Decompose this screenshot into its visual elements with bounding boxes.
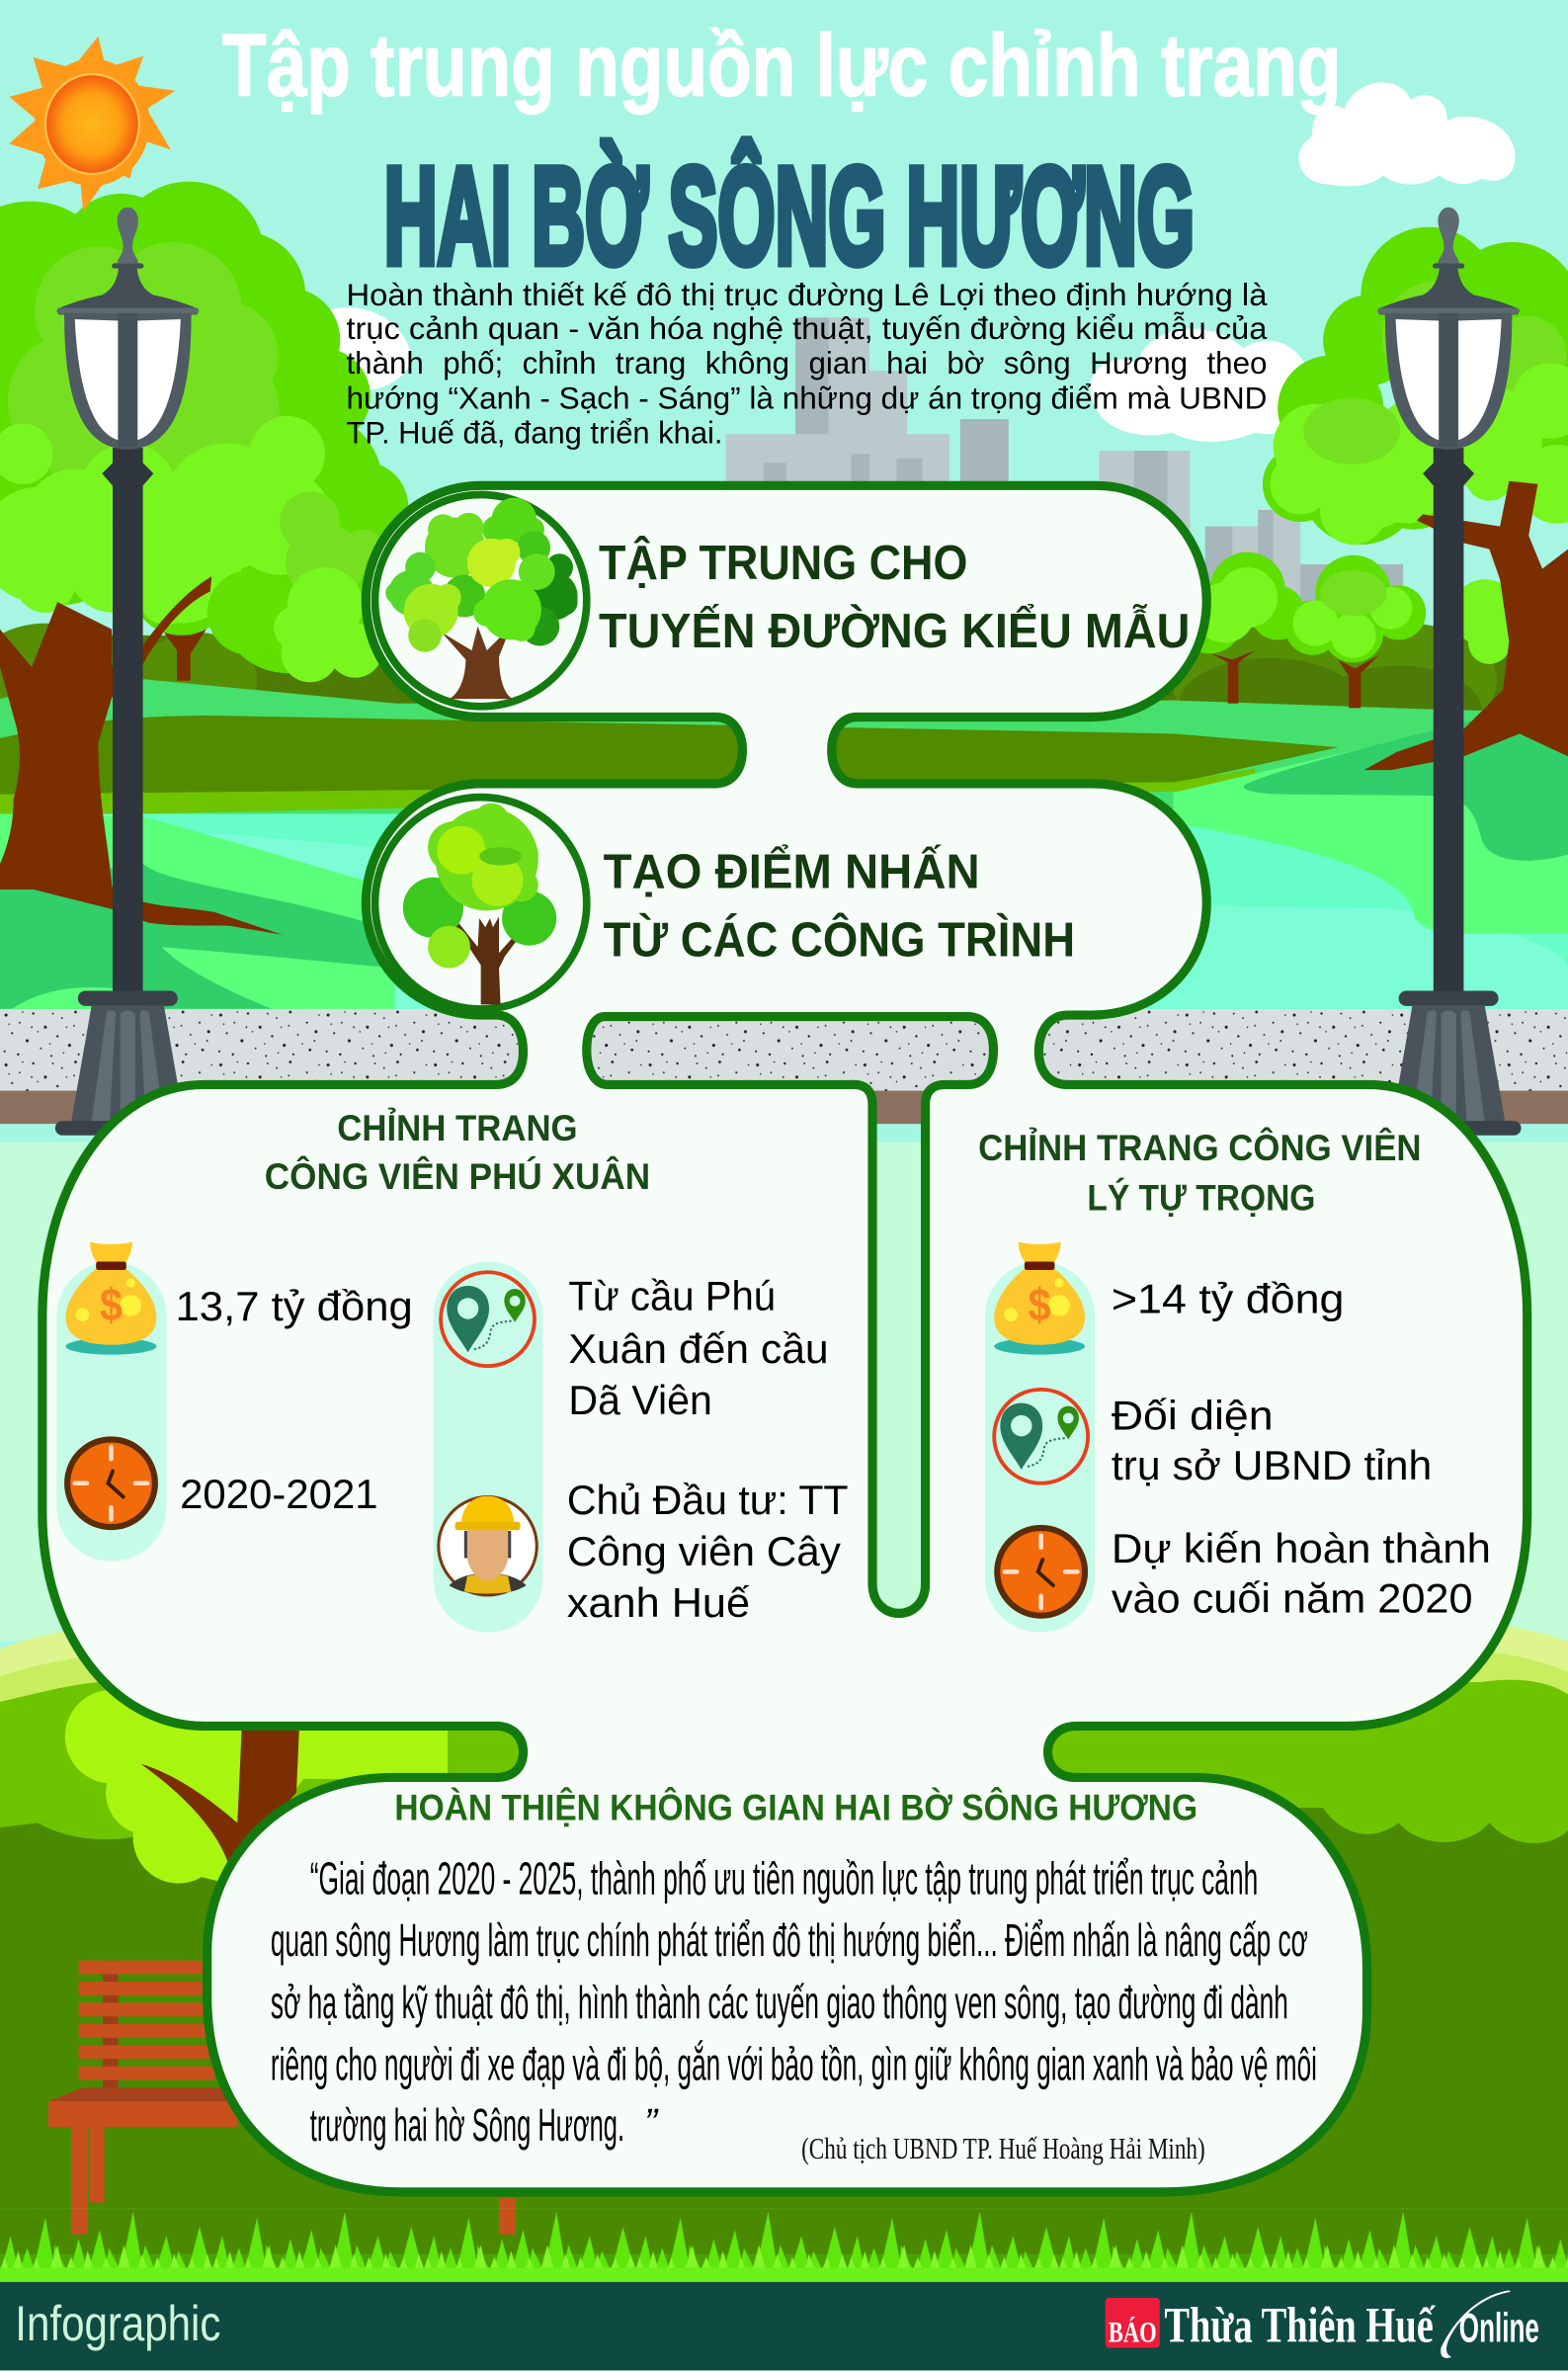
panel 4: công viên Lý Tự Trọng <box>978 1127 1491 1633</box>
quote text <box>271 1852 1317 2151</box>
panel: connected white frame <box>42 485 1527 2192</box>
location text: Từ cầu Phú <box>568 1273 776 1319</box>
completion text: Dự kiến hoàn thành <box>1112 1525 1491 1571</box>
heading: tạo điểm nhấn <box>604 845 1075 967</box>
newspaper logo: BÁO <box>1109 2316 1157 2348</box>
icon: route pin <box>994 1390 1088 1483</box>
intro paragraph: thành phố; chỉnh trang không gian hai bờ sông Hương theo <box>346 346 1267 381</box>
icon: route pin <box>441 1272 535 1366</box>
distant hills <box>0 617 1568 756</box>
location text: Xuân đến cầu <box>568 1325 829 1372</box>
intro paragraph: trục cảnh quan - văn hóa nghệ thuật, tuyến đường kiểu mẫu của <box>346 311 1268 346</box>
intro paragraph <box>346 278 1268 450</box>
location text: trụ sở UBND tỉnh <box>1112 1442 1432 1488</box>
right tree trunk <box>1363 481 1568 770</box>
investor text <box>567 1477 849 1626</box>
sun <box>9 37 176 212</box>
heading: tập trung: TUYẾN ĐƯỜNG KIỂU MẪU <box>599 604 1190 658</box>
heading: Lý Tự Trọng: LÝ TỰ TRỌNG <box>1087 1177 1315 1218</box>
city buildings <box>726 317 1403 650</box>
newspaper logo: Thừa Thiên Huế <box>1164 2297 1436 2352</box>
completion text: vào cuối năm 2020 <box>1112 1575 1473 1622</box>
icon: clock <box>64 1436 158 1530</box>
location text: Dã Viên <box>568 1377 712 1423</box>
left big tree canopy <box>0 182 416 682</box>
lawn and river <box>0 679 1568 1010</box>
heading: Lý Tự Trọng <box>978 1127 1422 1218</box>
heading: tập trung <box>599 536 1190 658</box>
heading: Phú Xuân: CHỈNH TRANG <box>337 1108 578 1148</box>
icon: leafy tree in ring <box>375 495 587 707</box>
investor text: Công viên Cây <box>567 1528 841 1574</box>
icon: young tree in ring <box>375 798 587 1009</box>
location text: Đối diện <box>1112 1392 1274 1438</box>
right tree canopy <box>1263 227 1568 545</box>
cloud: top right <box>1299 82 1515 186</box>
newspaper logo <box>1106 2290 1539 2358</box>
icon: money bag <box>994 1242 1085 1355</box>
heading: Phú Xuân: CÔNG VIÊN PHÚ XUÂN <box>265 1155 650 1197</box>
title line 1: Tập trung nguồn lực chỉnh trang <box>222 16 1341 114</box>
icon column: place and owner <box>433 1262 542 1633</box>
brown kerb <box>0 1091 1568 1124</box>
investor text: xanh Huế <box>567 1579 750 1626</box>
footer bar <box>0 2282 1568 2372</box>
pavement <box>0 1009 1568 1091</box>
location text <box>1112 1392 1432 1488</box>
heading: hoàn thiện: HOÀN THIỆN KHÔNG GIAN HAI BỜ SÔNG HƯƠNG <box>394 1786 1197 1827</box>
icon: clock <box>994 1525 1088 1619</box>
cost text: 13,7 tỷ đồng <box>176 1283 413 1329</box>
icon column: cost and time <box>56 1262 166 1562</box>
clouds behind paragraph <box>330 307 1310 442</box>
footer label: Infographic <box>15 2295 220 2351</box>
small distant trees <box>162 552 1518 708</box>
investor text: Chủ Đầu tư: TT <box>567 1477 849 1523</box>
icon: money bag <box>66 1242 156 1355</box>
heading: tạo điểm nhấn: TỪ CÁC CÔNG TRÌNH <box>604 912 1075 967</box>
icon column <box>985 1262 1095 1633</box>
right lamp post <box>1376 208 1522 1136</box>
quote text: ” <box>644 2101 659 2145</box>
panel 5: quote <box>271 1786 1317 2165</box>
intro paragraph: TP. Huế đã, đang triển khai. <box>346 415 723 450</box>
park bench <box>48 1961 516 2235</box>
icon: construction worker <box>439 1496 536 1595</box>
left lamp post <box>55 208 201 1136</box>
panel 1: tuyến đường kiểu mẫu <box>375 495 1190 707</box>
big lime tree behind quote panel <box>65 1690 448 1884</box>
grass strip <box>0 2209 1568 2284</box>
heading: tạo điểm nhấn: TẠO ĐIỂM NHẤN <box>604 845 980 898</box>
heading: tập trung: TẬP TRUNG CHO <box>599 536 967 590</box>
cost text: >14 tỷ đồng <box>1112 1276 1345 1322</box>
intro paragraph: hướng “Xanh - Sạch - Sáng” là những dự án trọng điểm mà UBND <box>346 381 1267 415</box>
lower meadow <box>0 1124 1568 2284</box>
time text: 2020-2021 <box>180 1471 378 1517</box>
left tree trunk <box>0 576 283 935</box>
panel 2: điểm nhấn <box>375 798 1075 1009</box>
location text <box>568 1273 829 1423</box>
intro paragraph: Hoàn thành thiết kế đô thị trục đường Lê Lợi theo định hướng là <box>346 278 1268 312</box>
heading: Phú Xuân <box>265 1108 650 1197</box>
completion text <box>1112 1525 1491 1622</box>
heading: Lý Tự Trọng: CHỈNH TRANG CÔNG VIÊN <box>978 1127 1422 1168</box>
attribution: (Chủ tịch UBND TP. Huế Hoàng Hải Minh) <box>801 2132 1205 2165</box>
quote text: trường hai hờ Sông Hương. <box>310 2099 624 2151</box>
panel 3: công viên Phú Xuân <box>56 1108 849 1633</box>
